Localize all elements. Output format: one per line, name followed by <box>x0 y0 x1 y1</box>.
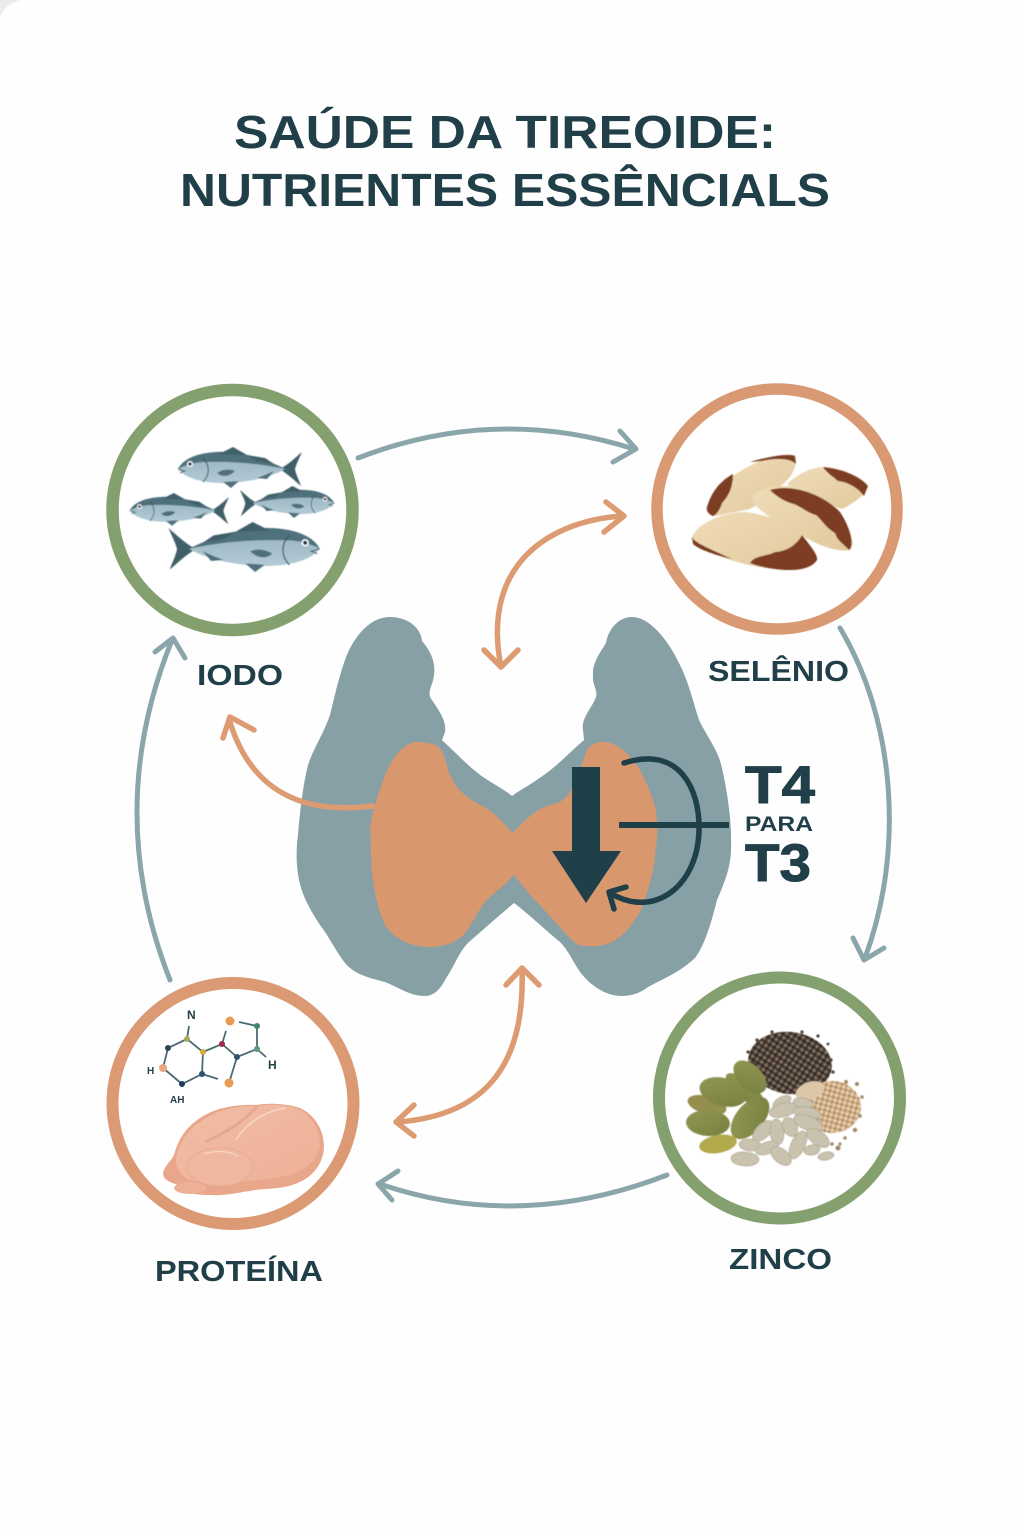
icon: amino acid molecule: AH <box>170 1095 184 1106</box>
panel: zinco <box>659 978 900 1276</box>
panel: iodo <box>112 390 352 692</box>
icon: fish group <box>130 447 334 572</box>
arrow: zinco to proteína <box>378 1171 667 1206</box>
curved arrow <box>609 759 699 909</box>
icon: amino acid molecule <box>147 1008 277 1106</box>
title <box>180 106 830 216</box>
panel: proteína <box>112 983 354 1288</box>
orange arrow: thyroid to selênio <box>484 502 624 667</box>
arrow: iodo to selênio <box>358 429 636 462</box>
title: NUTRIENTES ESSÊNCIALS <box>180 164 830 216</box>
orange arrow: thyroid to iodo <box>223 717 372 808</box>
thyroid inner shape <box>370 742 657 947</box>
ring <box>112 390 352 630</box>
arrow: selênio to zinco <box>840 628 889 960</box>
thyroid outer shape <box>297 617 731 996</box>
chia pile <box>744 1026 836 1100</box>
icon: amino acid molecule: H <box>147 1066 154 1077</box>
panel: selênio <box>657 389 897 688</box>
PARA label: PARA <box>745 813 813 836</box>
icon: seeds <box>685 1026 864 1169</box>
horizontal line <box>619 822 729 828</box>
T4 to T3 conversion diagram <box>552 756 816 909</box>
label: IODO <box>197 660 283 692</box>
sunflower seeds <box>731 1093 835 1169</box>
ring <box>657 389 897 629</box>
orange arrow: thyroid to proteína <box>396 968 539 1136</box>
arrow: proteína to iodo <box>137 638 185 980</box>
title: SAÚDE DA TIREOIDE: <box>234 106 776 158</box>
icon: amino acid molecule: N <box>187 1008 196 1022</box>
pumpkin seeds <box>685 1054 777 1156</box>
icon: amino acid molecule: H <box>268 1058 277 1072</box>
T3 label: T3 <box>745 834 811 893</box>
ring <box>112 983 354 1224</box>
label: ZINCO <box>729 1244 832 1276</box>
down arrow <box>552 767 621 903</box>
icon: brazil nuts <box>692 455 868 570</box>
label: SELÊNIO <box>708 654 849 688</box>
quinoa pile <box>803 1081 861 1133</box>
label: PROTEÍNA <box>155 1254 323 1288</box>
T4 label: T4 <box>745 756 816 815</box>
ring <box>659 978 900 1218</box>
thyroid gland <box>297 617 731 996</box>
icon: chicken breast <box>163 1104 324 1195</box>
